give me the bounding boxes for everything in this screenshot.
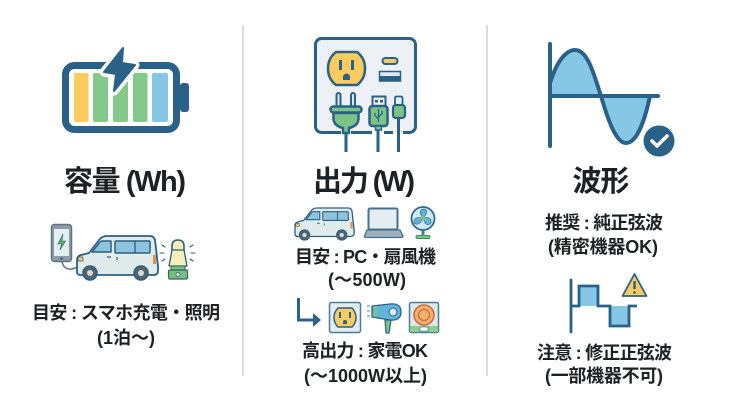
- usb-a port: [380, 72, 400, 81]
- usb-c port: [382, 58, 398, 64]
- text: capacity guideline: 目安 : スマホ充電・照明: [32, 303, 220, 323]
- text: recommended note: (精密機器OK): [548, 237, 658, 257]
- icon: phone charging: [52, 224, 78, 269]
- panel: waveform: [537, 44, 674, 386]
- icon: induction cooker: [410, 302, 438, 332]
- power plug: [330, 93, 403, 152]
- heading: capacity: 容量 (Wh): [64, 165, 186, 198]
- outlet: [328, 52, 365, 85]
- panel: capacity: [32, 48, 220, 348]
- icon: lantern: [160, 240, 195, 279]
- icon: modified sine wave: [571, 280, 637, 332]
- heading: waveform: 波形: [572, 165, 630, 198]
- arrow: step up: [298, 298, 321, 327]
- text: output guideline: 目安 : PC・扇風機: [295, 247, 436, 267]
- icon: warning triangle: [622, 274, 646, 296]
- text: high output: 高出力 : 家電OK: [302, 341, 428, 361]
- heading: output: 出力 (W): [313, 165, 415, 198]
- icon: fan: [412, 207, 434, 238]
- text: caution: 注意 : 修正正弦波: [537, 343, 672, 363]
- text: capacity duration: (1泊～): [97, 328, 155, 348]
- divider left: [242, 25, 244, 376]
- icon: sine wave: [550, 44, 674, 156]
- icon: van small: [295, 208, 354, 240]
- divider right: [486, 25, 488, 376]
- icon: laptop: [364, 208, 403, 238]
- text: caution note: (一部機器不可): [545, 366, 663, 386]
- usb plug: [370, 96, 388, 152]
- panel: output: [295, 38, 438, 386]
- text: recommended: 推奨 : 純正弦波: [545, 213, 663, 233]
- icon: hair dryer: [367, 304, 401, 333]
- icon: battery: [66, 48, 189, 130]
- text: output watt range: (～500W): [328, 270, 406, 290]
- icon: wall outlet: [330, 302, 360, 332]
- cable plug: [393, 96, 405, 152]
- icon: socket panel: [316, 38, 416, 152]
- text: high output watt range: (～1000W以上): [304, 366, 427, 386]
- icon: van: [77, 236, 158, 280]
